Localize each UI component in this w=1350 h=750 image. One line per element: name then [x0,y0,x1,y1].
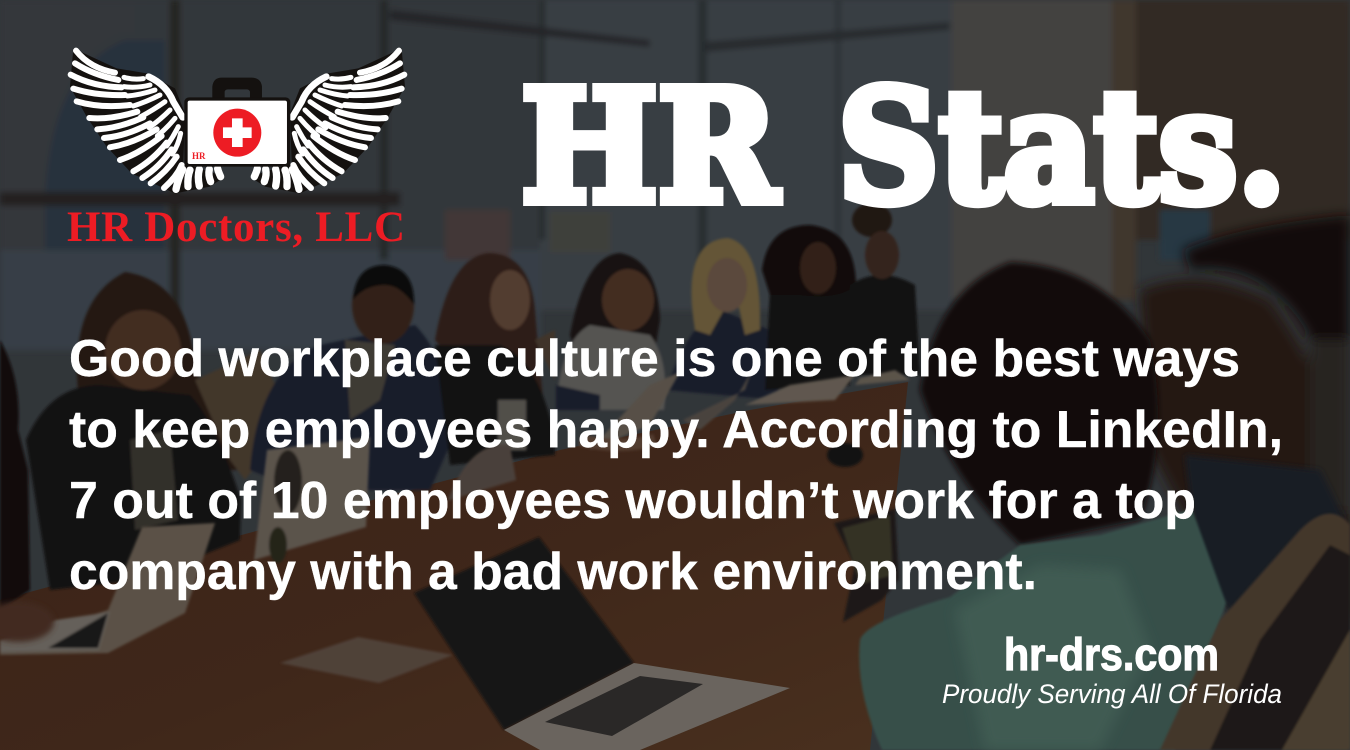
icon: medical bag: HR [192,151,206,161]
icon: wings [70,48,405,193]
right foreground: people [1140,215,1350,620]
body text: to keep employees happy. According to LinkedIn, [69,401,1283,459]
body text: 7 out of 10 employees wouldn’t work for a top [69,472,1196,530]
hand left [0,602,54,642]
woman with braids [77,272,240,470]
table [0,382,908,750]
paper on table [280,637,453,683]
body text: company with a bad work environment. [69,543,1037,601]
title: HR [521,55,779,238]
man [250,325,452,490]
tagline: Proudly Serving All Of Florida [942,679,1282,709]
woman with glasses [435,253,545,420]
chair right [1160,514,1350,750]
body text [69,330,1283,601]
smiling woman [570,253,660,350]
foreground woman's hair [920,262,1158,545]
title: Stats. [838,55,1286,238]
teal shirt [859,509,1226,750]
body text: Good workplace culture is one of the best ways [69,330,1240,388]
left edge person [0,340,30,610]
laptops far table [0,370,910,655]
people at far side [0,203,920,610]
big laptop [414,537,790,750]
title [521,55,1286,238]
website: hr-drs.com [1004,629,1219,680]
windows and wall [0,0,1350,350]
woman with curly hair [765,290,850,390]
chair and blonde woman [535,330,555,380]
icon: medical bag [184,78,290,167]
tablet [834,509,899,622]
company name: HR Doctors, LLC [67,204,405,251]
woman with bun [840,275,920,375]
chair behind [195,350,290,480]
logo: HR Doctors winged medical bag [67,48,405,251]
